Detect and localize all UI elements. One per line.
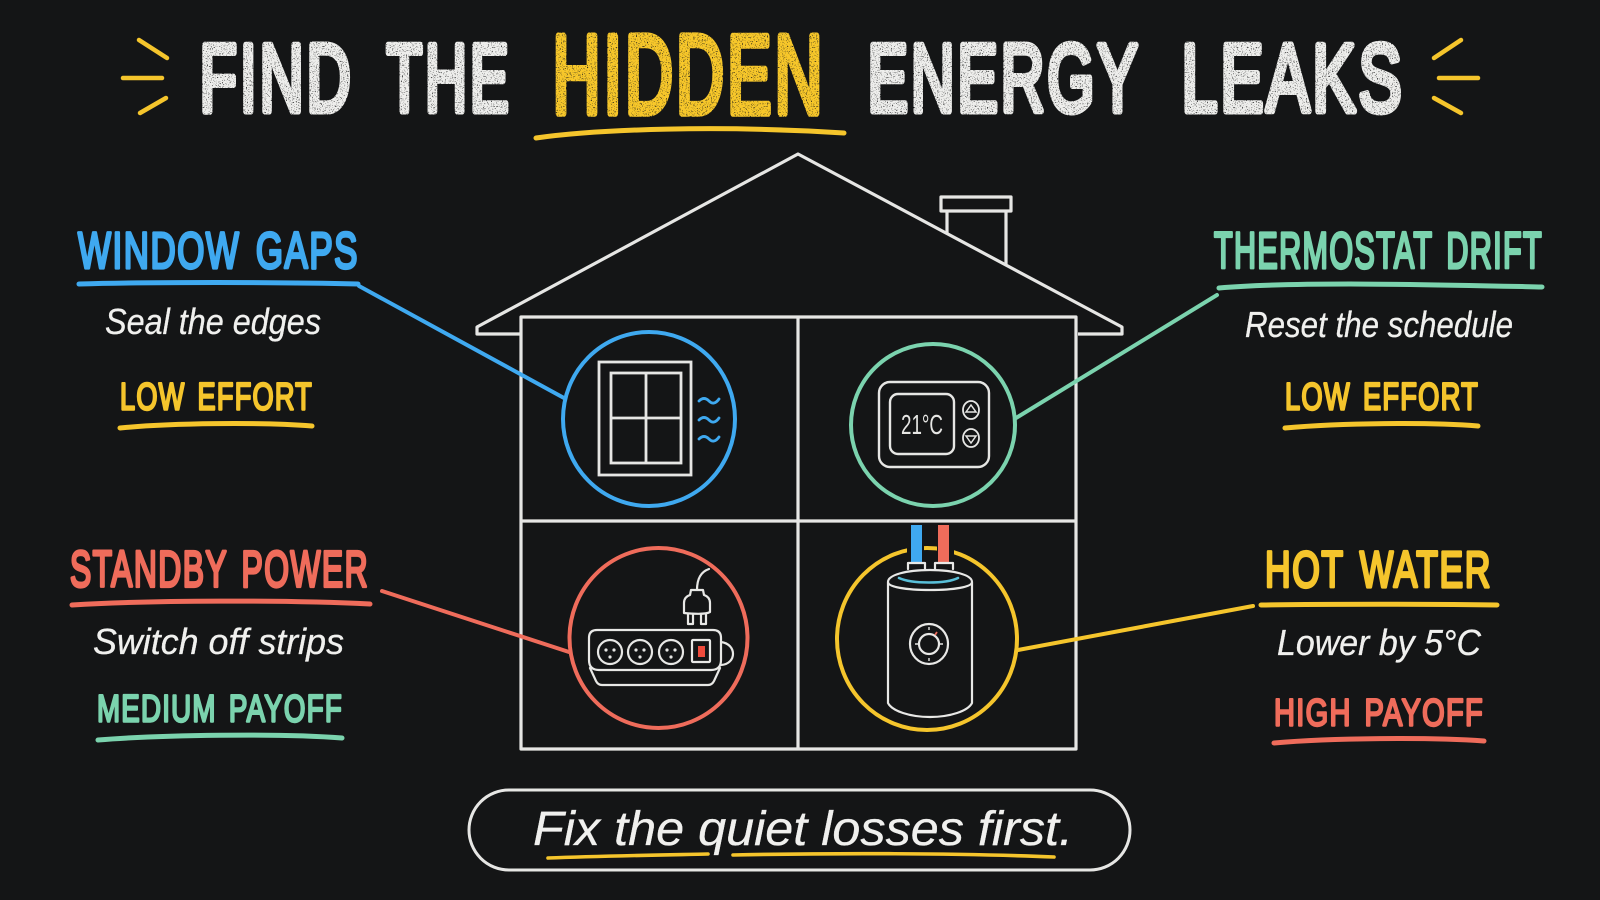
action: Switch off strips (93, 621, 344, 662)
rating: MEDIUM PAYOFF (97, 688, 343, 730)
rating underline (1274, 739, 1484, 743)
roof (477, 154, 1122, 334)
connector: thermostat drift (1016, 295, 1217, 418)
title: ENERGY (868, 25, 1140, 132)
chimney (941, 197, 1011, 264)
action: Seal the edges (105, 301, 321, 342)
rating underline (120, 424, 312, 428)
heading: STANDBY POWER (70, 540, 369, 598)
house walls and rooms (521, 317, 1076, 749)
takeaway text: Fix the quiet losses first. (533, 803, 1073, 856)
icon: water heater in yellow circle (837, 525, 1017, 730)
title (200, 13, 1404, 137)
connector: standby power (382, 591, 569, 652)
icon: thermostat in green circle: 21°C (901, 409, 943, 440)
callout: bottom takeaway pill (469, 790, 1130, 870)
icon: power strip in red circle (570, 548, 748, 728)
heading: WINDOW GAPS (78, 222, 359, 279)
heading underline (72, 601, 370, 605)
connector: window gaps (359, 286, 564, 398)
connector: hot water (1018, 606, 1253, 650)
heading underline (1219, 284, 1542, 288)
title: THE (386, 25, 512, 132)
panel: standby power (70, 540, 370, 740)
action: Reset the schedule (1245, 304, 1513, 345)
rating: LOW EFFORT (1285, 376, 1479, 418)
heading: HOT WATER (1265, 541, 1492, 598)
icon: thermostat in green circle (851, 344, 1015, 506)
title: LEAKS (1182, 25, 1404, 132)
rating: LOW EFFORT (120, 376, 313, 418)
panel: window gaps (78, 222, 359, 428)
right title burst (1434, 40, 1478, 113)
panel: hot water (1261, 541, 1497, 743)
title underline (536, 129, 844, 138)
panel: thermostat drift (1214, 222, 1543, 428)
title: HIDDEN (552, 13, 826, 137)
takeaway underline (548, 854, 1054, 858)
rating underline (1285, 424, 1478, 428)
left title burst (123, 40, 167, 113)
rating: HIGH PAYOFF (1274, 692, 1484, 734)
action: Lower by 5°C (1277, 622, 1482, 663)
heading underline (1261, 602, 1497, 608)
icon: window in blue circle (563, 332, 735, 506)
rating underline (98, 735, 342, 740)
title: FIND (200, 25, 354, 132)
house outline (477, 154, 1122, 749)
heading underline (79, 282, 358, 284)
